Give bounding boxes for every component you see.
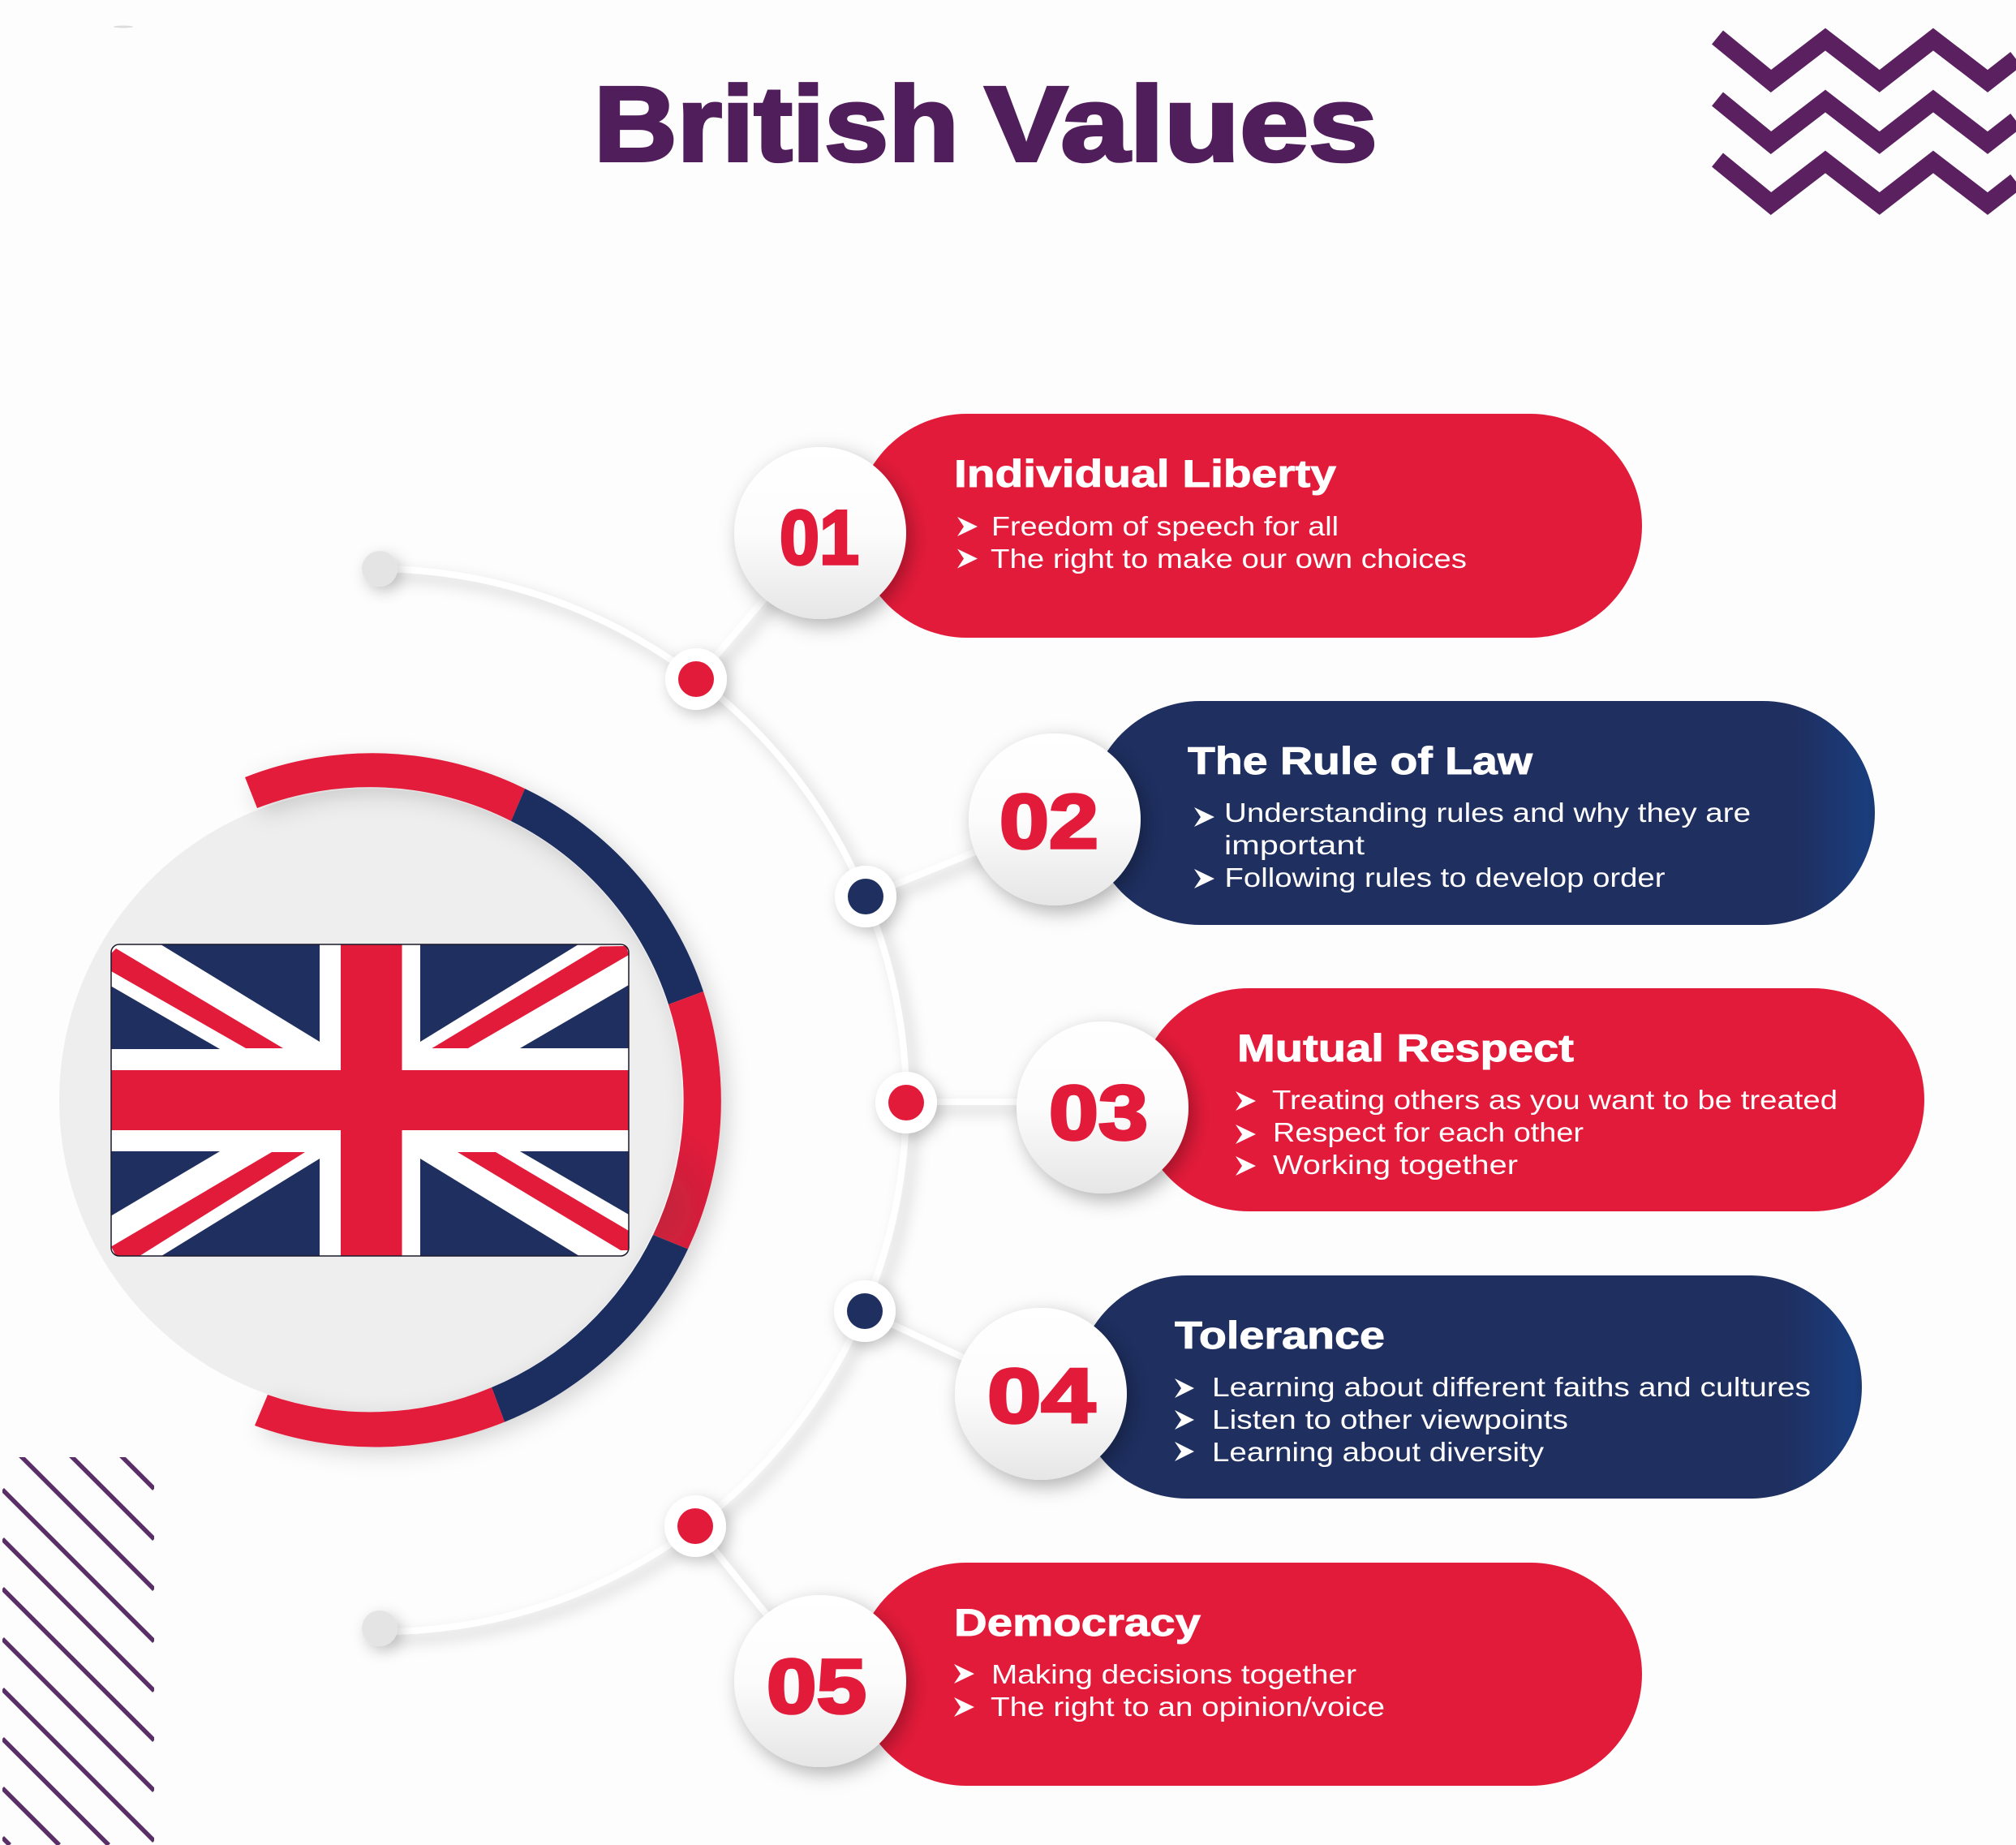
panel: 03 Mutual Respect — [1137, 988, 1924, 1211]
title — [594, 64, 1378, 183]
heading: The Rule of Law — [1188, 739, 1533, 782]
bullet list — [1175, 1373, 1811, 1468]
number badge 05: 05 — [767, 1644, 866, 1730]
node 2 — [835, 866, 896, 927]
heading: Democracy — [954, 1601, 1201, 1644]
segmented ring — [245, 753, 721, 1447]
bullet list: Making decisions together — [991, 1660, 1356, 1690]
bullet list: Treating others as you want to be treated — [1272, 1086, 1838, 1116]
bullet list — [1194, 798, 1751, 893]
central disc with ring and flag — [59, 753, 721, 1447]
panel: 04 Tolerance — [1076, 1275, 1862, 1499]
bullet list — [954, 1660, 1385, 1722]
bullet list: Understanding rules and why they are — [1224, 798, 1751, 828]
bullet list — [1236, 1086, 1838, 1181]
decorative zigzag lines — [1717, 37, 2016, 204]
panel: 01 Individual Liberty — [855, 414, 1642, 638]
number badge 04 — [955, 1308, 1127, 1480]
bullet list: The right to an opinion/voice — [991, 1692, 1385, 1722]
end dot: bottom — [362, 1611, 398, 1646]
grey disc — [59, 789, 682, 1412]
bullet list: important — [1224, 831, 1365, 861]
end dot: top — [362, 551, 398, 587]
decorative hatch lines — [2, 1457, 154, 1845]
heading: Individual Liberty — [954, 452, 1336, 495]
bullet list — [957, 512, 1467, 574]
bullet list: Listen to other viewpoints — [1212, 1405, 1568, 1435]
number badge 02: 02 — [999, 779, 1098, 865]
title: Values — [985, 64, 1378, 183]
bullet list: Respect for each other — [1273, 1118, 1584, 1148]
bullet list: Learning about different faiths and cultures — [1212, 1373, 1811, 1403]
title: British — [594, 64, 959, 183]
number badge 03 — [1017, 1021, 1189, 1193]
bullet list: Learning about diversity — [1212, 1438, 1544, 1468]
bullet list: Freedom of speech for all — [991, 512, 1339, 542]
panel: 02 The Rule of Law — [1089, 701, 1875, 925]
bullet list: Working together — [1273, 1150, 1518, 1181]
connector arc — [380, 533, 1103, 1681]
node 5 — [664, 1495, 726, 1557]
number badge 02 — [969, 733, 1141, 905]
number badge 04: 04 — [987, 1353, 1095, 1439]
number badge 03: 03 — [1049, 1070, 1148, 1156]
node 4 — [834, 1280, 896, 1342]
bullet list: Following rules to develop order — [1225, 863, 1665, 893]
panel: 05 Democracy — [855, 1563, 1642, 1786]
heading: Mutual Respect — [1237, 1026, 1574, 1069]
number badge 01: 01 — [780, 495, 859, 581]
bullet list: The right to make our own choices — [991, 544, 1467, 574]
union jack flag — [111, 944, 629, 1256]
number badge 01 — [734, 447, 906, 619]
number badge 05 — [734, 1595, 906, 1767]
heading: Tolerance — [1175, 1314, 1385, 1357]
node 1 — [665, 648, 727, 710]
node 3 — [875, 1072, 937, 1133]
